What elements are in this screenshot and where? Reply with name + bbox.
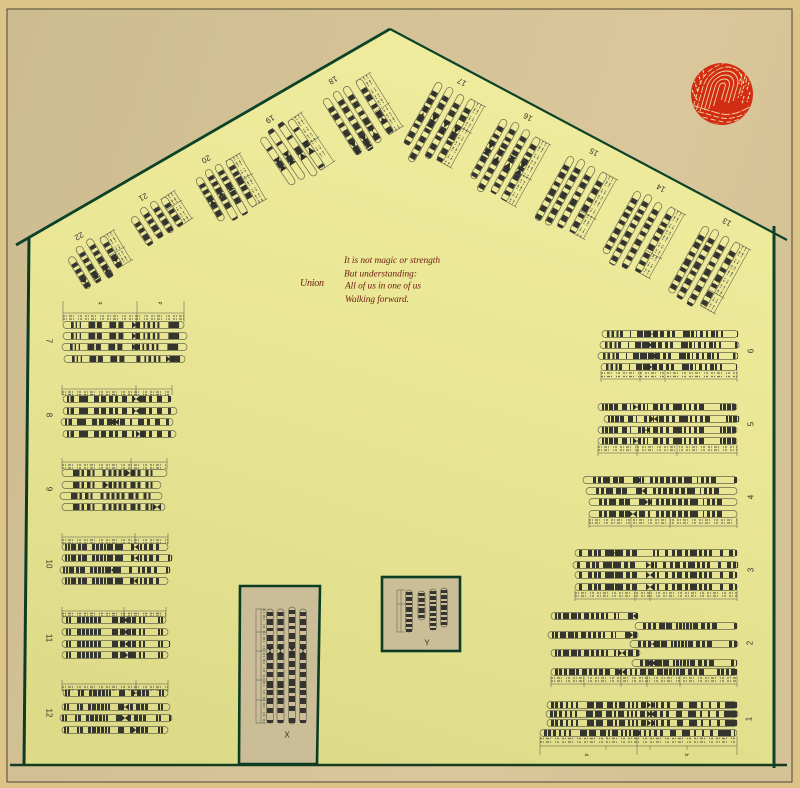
chromosome group 21 — [129, 187, 194, 247]
poem: But understanding: — [344, 270, 417, 280]
window panel: Y chromosomes — [382, 577, 460, 651]
chromosome group 14: 14 — [654, 182, 667, 194]
chromosome group 13: 13 — [720, 216, 733, 228]
chromosome group 8 — [44, 385, 177, 438]
poem title: Union — [300, 278, 324, 289]
chromosome group 9 — [44, 458, 167, 510]
poem: It is not magic or strength — [343, 256, 440, 266]
chromosome group 7: p — [157, 302, 163, 305]
chromosome group 7 — [44, 301, 187, 362]
chromosome group 6: 6 — [746, 348, 756, 353]
chromosome group 19 — [258, 109, 336, 190]
chromosome group 14 — [599, 182, 686, 284]
chromosome group 5: 5 — [746, 421, 756, 426]
chromosome group 3 — [573, 550, 756, 601]
chromosome group 17 — [397, 76, 486, 181]
window panel: Y chromosomes: Y — [424, 638, 430, 648]
chromosome group 12 — [44, 680, 172, 734]
poem: All of us in one of us — [344, 280, 421, 292]
chromosome group 1 — [540, 702, 754, 756]
chromosome group 3: 3 — [746, 567, 756, 572]
chromosome group 13 — [667, 216, 752, 318]
door panel: X chromosomes — [239, 586, 320, 764]
chromosome group 22: 22 — [72, 230, 85, 242]
chromosome group 15: 15 — [587, 146, 600, 158]
chromosome group 4: 4 — [746, 494, 756, 499]
chromosome group 16 — [466, 111, 553, 211]
chromosome group 19: 19 — [263, 113, 276, 125]
fingerprint seal — [690, 63, 755, 125]
chromosome group 10: 10 — [44, 560, 54, 569]
chromosome group 7: 7 — [44, 339, 54, 344]
chromosome group 4 — [583, 476, 756, 528]
poem: Walking forward. — [345, 294, 409, 305]
chromosome group 8: 8 — [44, 413, 54, 418]
chromosome group 21: 21 — [136, 191, 149, 203]
chromosome group 16: 16 — [521, 111, 534, 123]
chromosome group 1: 1 — [744, 716, 754, 721]
chromosome group 18: 18 — [326, 74, 339, 86]
chromosome group 11 — [44, 607, 170, 658]
chromosome group 1: q — [684, 753, 690, 756]
chromosome group 12: 12 — [44, 709, 54, 718]
chromosome group 20 — [194, 151, 269, 228]
chromosome group 2 — [548, 612, 754, 687]
chromosome group 7: q — [97, 302, 103, 305]
chromosome group 9: 9 — [44, 487, 54, 492]
chromosome group 6 — [598, 330, 756, 382]
poem — [343, 256, 440, 305]
door panel: X chromosomes: X — [284, 730, 290, 740]
chromosome group 11: 11 — [44, 634, 54, 643]
chromosome group 22 — [64, 225, 135, 292]
chromosome group 18 — [322, 70, 406, 158]
chromosome group 10 — [44, 533, 172, 584]
chromosome group 5 — [598, 404, 756, 456]
chromosome group 15 — [534, 146, 618, 245]
chromosome group 20: 20 — [199, 153, 212, 165]
chromosome group 17: 17 — [455, 76, 468, 88]
chromosome group 2: 2 — [746, 640, 754, 645]
chromosome group 1: p — [584, 753, 590, 756]
